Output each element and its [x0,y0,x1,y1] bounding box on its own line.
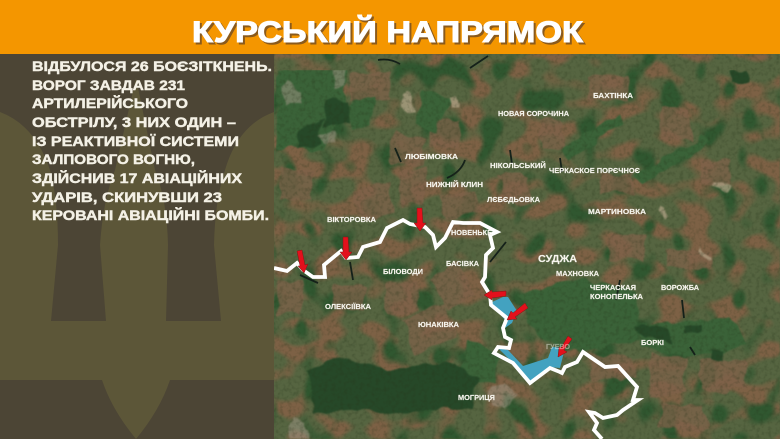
place labels: БОРКІ [641,338,664,347]
place labels: ЛЄБЄДЬОВКА [487,195,541,204]
title: КУРСЬКИЙ НАПРЯМОК [192,15,584,49]
place labels: ЧЕРКАСКАЯ [590,283,636,292]
panel: text background with trident [0,54,274,439]
title: КУРСЬКИЙ НАПРЯМОК [194,17,586,51]
attack arrows [297,208,572,357]
place labels: ЮНАКІВКА [418,320,460,329]
text block: summary: ОБСТРІЛУ, 3 НИХ ОДИН – [32,114,236,130]
text block: summary: УДАРІВ, СКИНУВШИ 23 [32,189,222,205]
place labels: ВОРОЖБА [661,283,700,292]
place labels: ОЛЕКСІЇВКА [325,302,372,311]
place labels: ЧЕРКАСКОЕ ПОРЄЧНОЄ [549,166,641,175]
place labels: ГУЕВО [546,342,570,351]
place labels: МАРТИНОВКА [588,207,647,216]
text block: summary: АРТИЛЕРІЙСЬКОГО [32,94,188,111]
place labels: БІЛОВОДИ [383,267,423,276]
place labels: НИЖНІЙ КЛИН [426,180,483,189]
place labels [325,91,700,402]
place labels: МОГРИЦЯ [458,393,495,402]
text block: summary: ВІДБУЛОСЯ 26 БОЄЗІТКНЕНЬ. [32,58,272,74]
place labels: БАХТІНКА [593,91,634,100]
place labels: НІКОЛЬСЬКИЙ [490,161,546,170]
border line [274,220,638,439]
header bar [0,0,780,54]
place labels: НОВАЯ СОРОЧИНА [498,109,570,118]
place labels: НОВЕНЬКЕ [451,228,492,237]
occupied area: Suzha west [490,297,565,382]
satellite map [274,54,780,439]
text block: summary: КЕРОВАНІ АВІАЦІЙНІ БОМБИ. [32,206,269,223]
place labels: СУДЖА [538,254,577,265]
place labels: ВІКТОРОВКА [327,215,377,224]
place labels: КОНОПЕЛЬКА [590,292,644,301]
place labels: ЛЮБІМОВКА [405,152,459,161]
text block: summary: ІЗ РЕАКТИВНОЇ СИСТЕМИ [32,133,239,149]
text block: summary: ВОРОГ ЗАВДАВ 231 [32,77,185,93]
text block: summary: ЗАЛПОВОГО ВОГНЮ, [32,151,195,167]
place labels: МАХНОВКА [556,269,600,278]
place labels: БАСІВКА [446,259,480,268]
text block: summary [32,58,272,223]
text block: summary: ЗДІЙСНИВ 17 АВІАЦІЙНИХ [32,169,243,186]
